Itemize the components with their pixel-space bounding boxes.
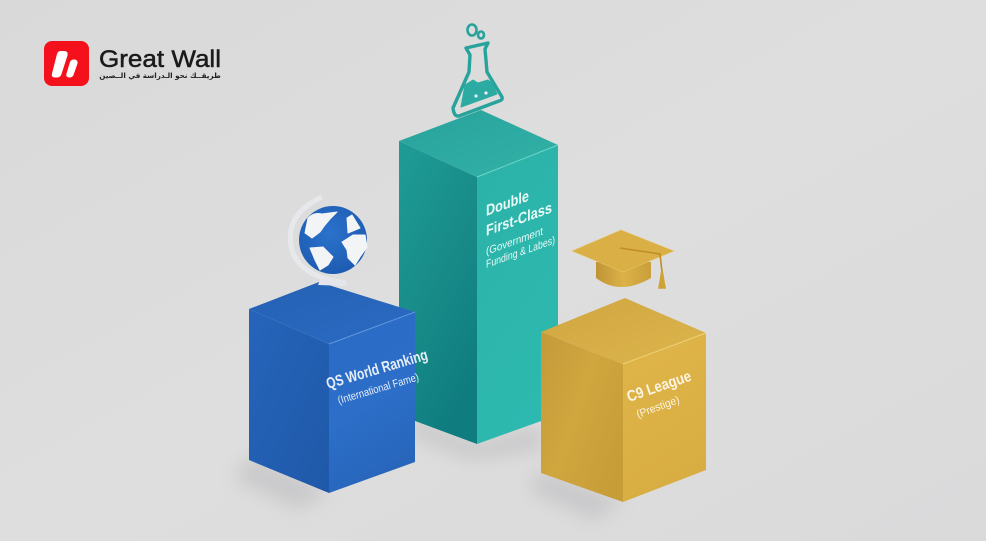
teal top face [399, 110, 558, 177]
bar: QS World Ranking [249, 282, 430, 493]
gold right face [623, 333, 706, 502]
blue right face [329, 312, 415, 493]
tassel [620, 248, 665, 288]
globe stand [290, 197, 346, 283]
blue left face [249, 309, 329, 493]
label: Double [486, 188, 529, 220]
icon: flask [453, 24, 502, 116]
cap board [572, 230, 674, 272]
bar: C9 League [541, 298, 706, 502]
bubbles [468, 24, 476, 36]
logo [44, 41, 221, 86]
label: (Government [486, 226, 544, 258]
globe sphere [299, 206, 367, 274]
label: Funding & Labes) [486, 234, 555, 271]
label: First-Class [486, 200, 552, 240]
label: (International Fame) [336, 372, 420, 407]
label: (Prestige) [635, 394, 681, 421]
icon: graduation cap [572, 230, 674, 288]
label [324, 347, 430, 407]
label: QS World Ranking [324, 347, 430, 393]
gold top face [541, 298, 706, 364]
logo tagline: طريقــك نحو الـدراسة في الــصين [99, 71, 221, 80]
label: C9 League [625, 368, 694, 406]
label [486, 179, 555, 271]
logo icon [44, 41, 89, 86]
cap base [596, 262, 651, 287]
icon: globe [290, 197, 367, 286]
label [625, 368, 694, 421]
bar: Double First-Class [399, 110, 558, 444]
flask outline [453, 43, 502, 116]
continents [305, 212, 367, 270]
gold left face [541, 332, 623, 502]
logo name: Great Wall [99, 46, 221, 73]
flask liquid [461, 80, 497, 107]
floor shadows [235, 412, 623, 520]
teal right face [477, 145, 558, 444]
teal left face [399, 141, 477, 444]
blue top face [249, 282, 415, 344]
